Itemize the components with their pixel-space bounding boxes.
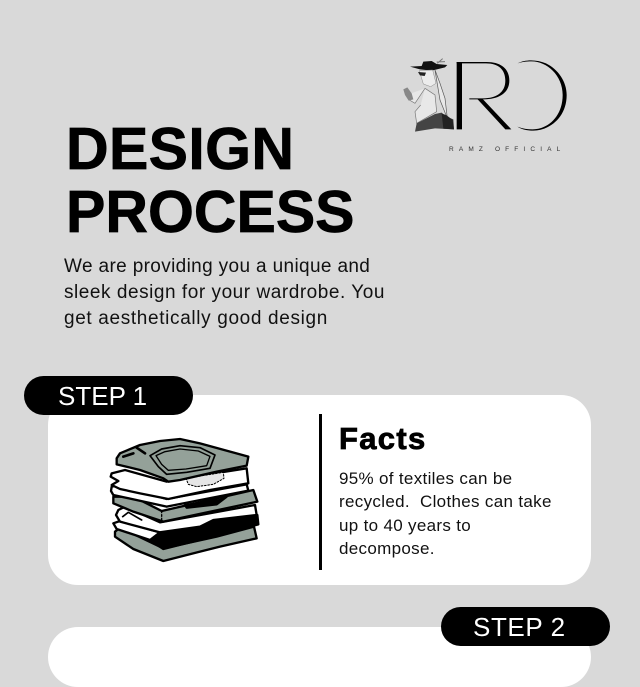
facts text: 95% of textiles can be	[339, 469, 512, 488]
bottom grey shirt	[115, 527, 257, 561]
panel: step 2 card	[48, 627, 591, 687]
panel: step 1 card	[48, 395, 591, 585]
title: DESIGN	[66, 116, 294, 182]
icon: stack of folded clothes	[110, 438, 260, 562]
intro text	[64, 256, 385, 329]
label: step 2: STEP 2	[473, 612, 566, 642]
logo tagline: RAMZ OFFICIAL	[449, 146, 565, 153]
white shirt top	[111, 468, 248, 499]
top grey shirt	[117, 439, 248, 482]
white shirt lower	[116, 505, 257, 532]
white shirt second	[111, 484, 248, 507]
facts text: decompose.	[339, 539, 435, 558]
intro text: get aesthetically good design	[64, 308, 328, 329]
intro text: sleek design for your wardrobe. You	[64, 282, 385, 303]
label: step 2	[441, 607, 610, 646]
grey shirt middle	[113, 490, 257, 522]
facts text: up to 40 years to	[339, 516, 471, 535]
title: PROCESS	[66, 179, 355, 245]
intro text: We are providing you a unique and	[64, 256, 370, 277]
logo letters RO	[457, 60, 567, 131]
heading: Facts: Facts	[339, 421, 426, 456]
icon: woman with hat	[403, 59, 454, 132]
title	[66, 116, 355, 245]
logo: RAMZ Official	[403, 58, 567, 132]
label: step 1: STEP 1	[58, 381, 147, 411]
white sliver	[113, 521, 160, 540]
label: step 1	[24, 376, 193, 415]
facts text	[339, 469, 552, 558]
black shirt	[150, 515, 258, 549]
facts text: recycled. Clothes can take	[339, 492, 552, 511]
dotted patch	[186, 472, 224, 487]
divider	[319, 414, 322, 570]
